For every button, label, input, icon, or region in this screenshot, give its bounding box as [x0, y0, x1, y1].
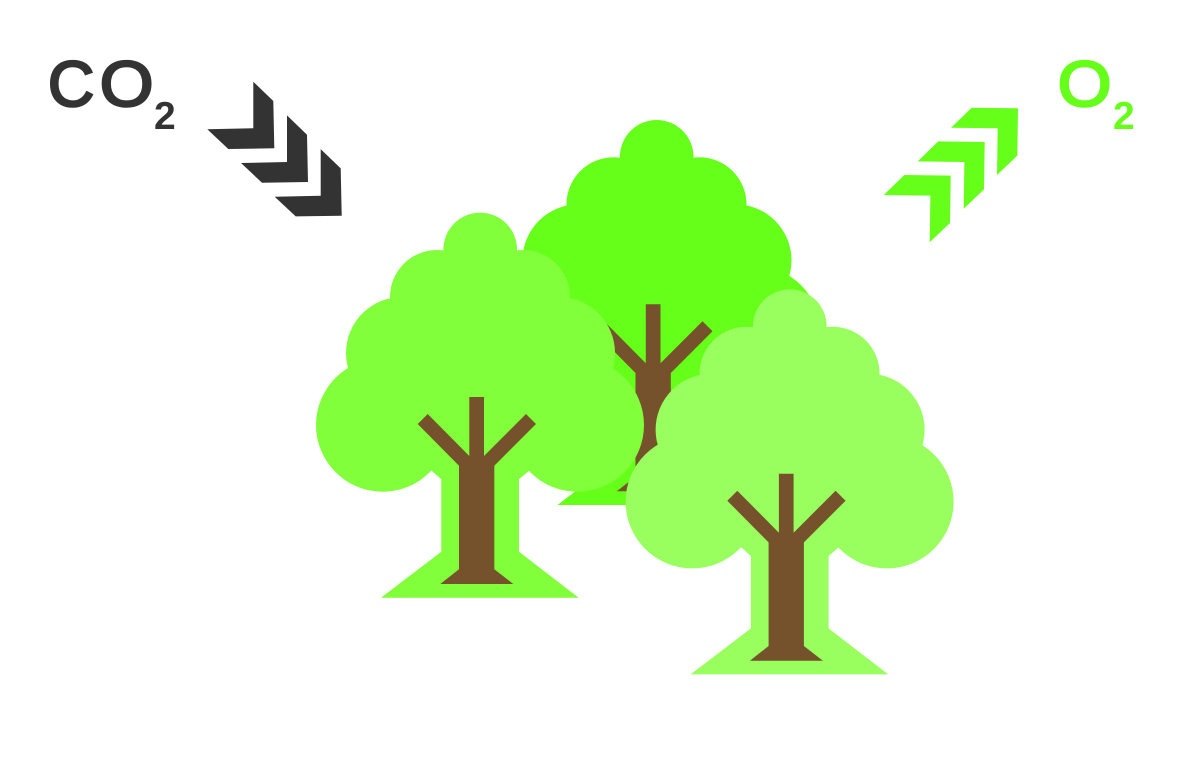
- label: O2: 2: [1113, 95, 1135, 138]
- arrow: CO2 chevrons pointing down into the trees: [207, 82, 342, 216]
- arrow: O2 chevrons pointing up out of the trees: [884, 108, 1018, 242]
- label: O2: [1058, 49, 1135, 138]
- label: CO2: O: [100, 49, 154, 120]
- label: O2: O: [1058, 49, 1112, 120]
- tree: left tree, medium green: [316, 213, 644, 598]
- label: CO2: 2: [154, 95, 176, 138]
- tree: front right tree, light green: [626, 289, 954, 674]
- label: CO2: [48, 48, 176, 138]
- label: CO2: C: [48, 48, 94, 120]
- tree: back centre tree, bright green: [492, 120, 820, 505]
